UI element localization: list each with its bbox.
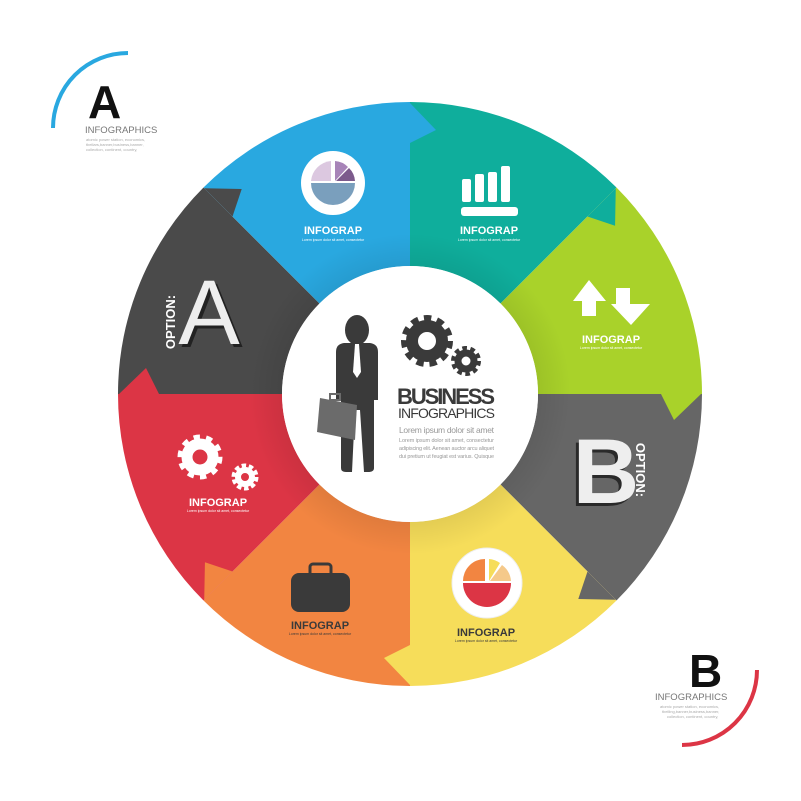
red panel: gears icon: INFOGRAP (189, 497, 247, 509)
segment: teal (410, 102, 616, 303)
green panel: up/down arrows icon (573, 280, 650, 350)
dark panel: option A: OPTION: (163, 295, 178, 349)
segment: blue (204, 102, 410, 304)
dark panel: option A: A (178, 262, 240, 364)
gray panel: option B: B (570, 424, 636, 526)
green panel: up/down arrows icon: INFOGRAP (582, 334, 640, 346)
center title text: Lorem ipsum dolor sit amet, consectetur (399, 438, 494, 444)
corner B label: B (689, 645, 722, 697)
corner A label: tbellars,banner,business,banner, (86, 142, 144, 147)
corner B label: tbelling,banner,business,banner, (662, 709, 719, 714)
corner A label: INFOGRAPHICS (85, 125, 157, 136)
corner B label: atomic power station, economics, (660, 704, 719, 709)
corner A label (53, 53, 157, 152)
yellow panel: pie icon: INFOGRAP (457, 627, 515, 639)
center title text: BUSINESS (397, 384, 495, 409)
corner B label: collection, continent, country, (667, 714, 718, 719)
corner A label: atomic power station, economics, (86, 137, 145, 142)
icon: businessman (317, 315, 378, 472)
blue panel: pie icon and label: Lorem ipsum dolor sit amet, consectetur (302, 238, 365, 242)
icon: center gears (405, 319, 478, 374)
green panel: up/down arrows icon: Lorem ipsum dolor sit amet, consectetur (580, 346, 643, 350)
teal panel: bar chart icon: Lorem ipsum dolor sit amet, consectetur (458, 238, 521, 242)
segment: gray B (500, 394, 702, 600)
segment: yellow (410, 484, 616, 686)
segment: red (118, 394, 320, 600)
yellow panel: pie icon: Lorem ipsum dolor sit amet, consectetur (455, 639, 518, 643)
teal panel: bar chart icon: INFOGRAP (460, 225, 518, 237)
center title text (397, 384, 495, 460)
corner A label: collection, continent, country, (86, 147, 137, 152)
corner A label: A (88, 76, 121, 128)
center title text: adipiscing elit. Aenean auctor arcu aliquet (399, 446, 494, 452)
gray panel: option B: B (573, 421, 639, 523)
corner B label: INFOGRAPHICS (655, 692, 727, 703)
center title text: INFOGRAPHICS (398, 405, 495, 421)
red panel: gears icon (181, 438, 256, 513)
segment: orange (204, 484, 410, 686)
arrow tips (119, 103, 701, 685)
orange panel: briefcase icon: INFOGRAP (291, 620, 349, 632)
orange panel: briefcase icon: Lorem ipsum dolor sit amet, consectetur (289, 632, 352, 636)
dark panel: option A: A (181, 265, 243, 367)
ring diagram (118, 102, 702, 686)
center title text: Lorem ipsum dolor sit amet (399, 425, 495, 435)
red panel: gears icon: Lorem ipsum dolor sit amet, consectetur (187, 509, 250, 513)
blue panel: pie icon and label: INFOGRAP (304, 225, 362, 237)
segment: dark gray A (118, 188, 320, 394)
center white circle (282, 266, 538, 522)
orange panel: briefcase icon (289, 564, 352, 636)
blue panel: pie icon and label (301, 151, 365, 242)
segment: green (500, 188, 702, 394)
teal panel: bar chart icon (458, 166, 521, 242)
gray panel: option B: OPTION: (633, 443, 648, 497)
corner B label (655, 645, 757, 745)
center title text: dui pretium ut feugiat est varius. Quisque (399, 454, 494, 460)
yellow panel: pie icon (452, 548, 522, 643)
